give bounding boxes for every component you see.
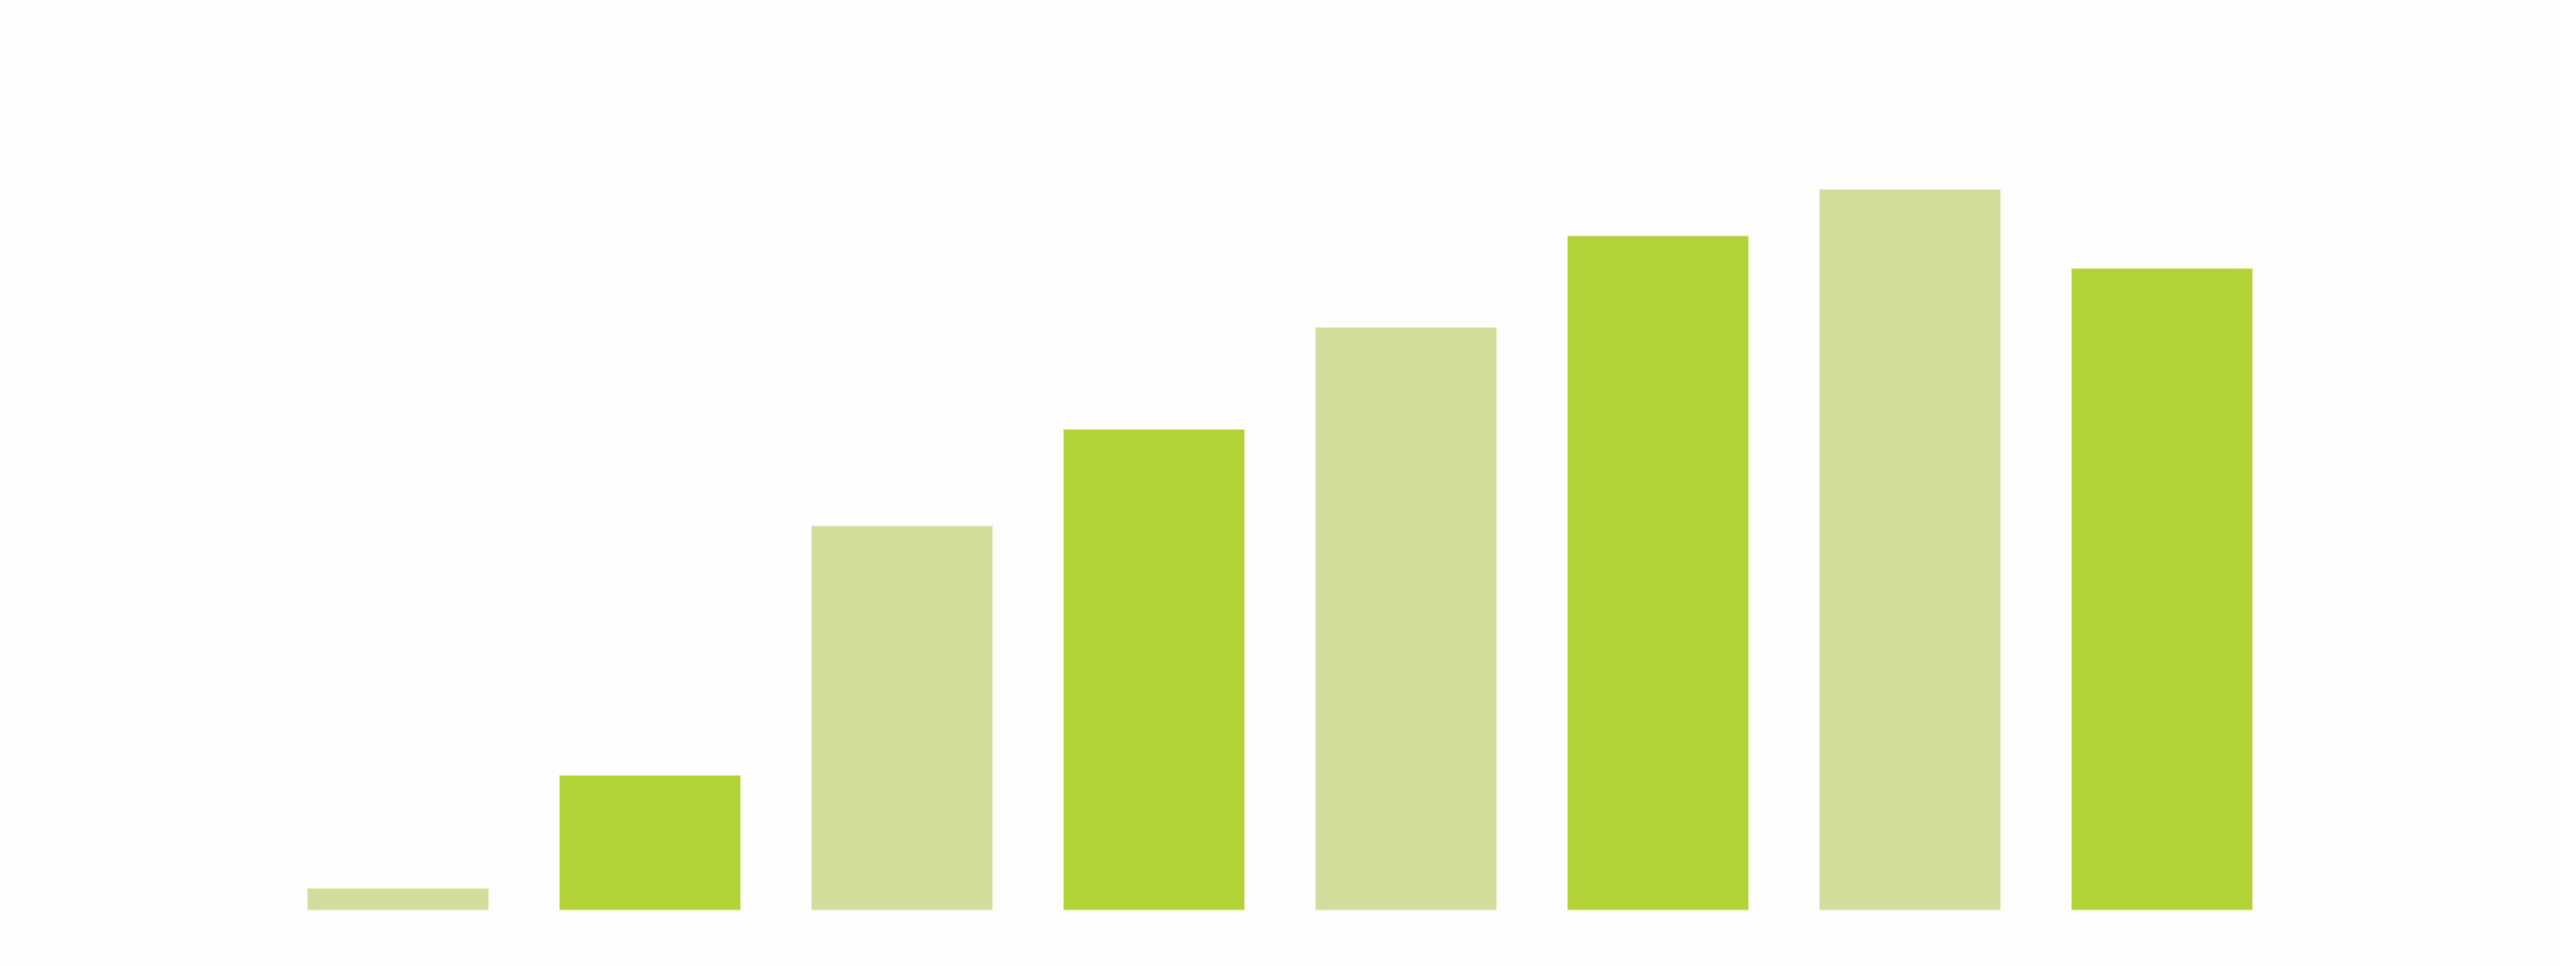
bar 4 — [1064, 430, 1244, 910]
bar 2 — [560, 776, 740, 910]
bar 6 — [1568, 236, 1748, 910]
bar 1 — [308, 888, 488, 910]
bar 7 — [1820, 190, 2000, 910]
bar 8 — [2072, 268, 2252, 910]
bar 3 — [812, 526, 992, 910]
bar 5 — [1316, 328, 1496, 910]
